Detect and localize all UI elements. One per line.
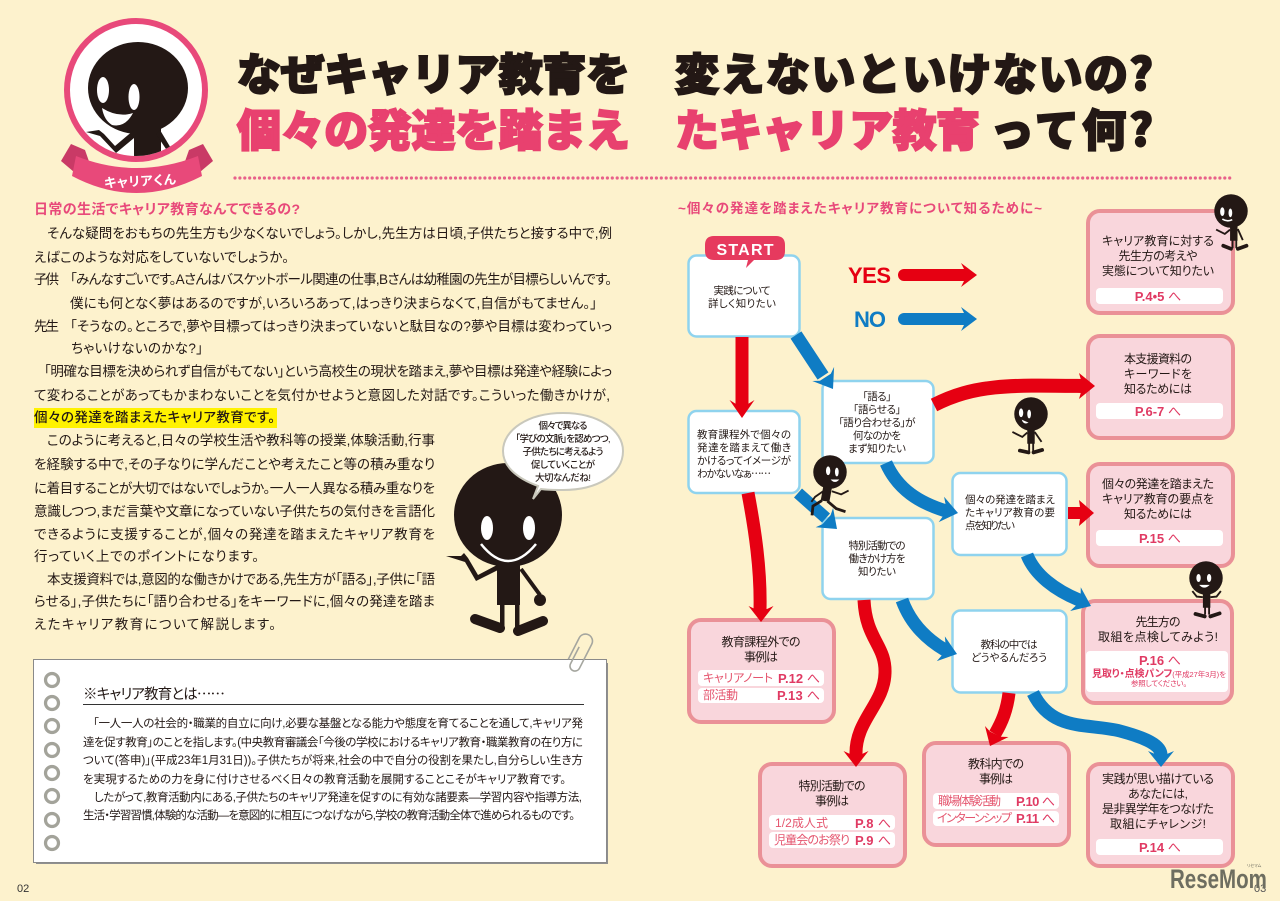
result: check efforts: [1083, 601, 1232, 703]
icon: character middle: [1012, 397, 1048, 452]
arrow: points yes: [1068, 500, 1094, 526]
flow box: key points: 個々の発達を踏まえ: [965, 493, 1055, 506]
result: subject examples: 職場体験活動: [938, 793, 1001, 808]
text block: explanation: を経験する中で,その子なりに学んだことや考えたこと等の積み重なり: [34, 456, 435, 472]
text block: intro dialogue: 先生: [34, 319, 59, 334]
text block: intro dialogue: 子供: [34, 272, 59, 287]
result: special activity examples: 1/2成人式: [775, 816, 828, 830]
flow box: special activities: 働きかけ方を: [848, 552, 906, 565]
title: なぜキャリア教育を: [237, 39, 630, 103]
watermark: ReseMom: ReseMom: [1170, 864, 1267, 895]
text block: intro dialogue: 「そうなの。ところで,夢や目標ってはっきり決まっていないと駄目なの?夢や目標は変わっていっ: [70, 319, 612, 334]
legend: NO arrow: [854, 307, 977, 332]
result: subject examples: P.10 へ: [1016, 794, 1055, 809]
arrow: points no: [1027, 555, 1096, 618]
result: outside curriculum examples: 事例は: [744, 650, 778, 664]
result: subject examples: [924, 743, 1069, 845]
flow box: start: 実践について: [714, 284, 770, 297]
callout: speech bubble: 大切なんだね!: [535, 472, 591, 484]
arrow: outside curriculum no: [798, 493, 846, 539]
result: keywords: 本支援資料の: [1124, 352, 1192, 366]
arrow: subject no: [1033, 693, 1174, 767]
callout: speech bubble: [503, 413, 623, 499]
legend: NO arrow: NO: [854, 307, 886, 332]
arrow: talk no: [886, 463, 961, 526]
label: START: [705, 236, 785, 268]
result: special activity examples: 児童会のお祭り: [774, 833, 850, 847]
flow box: special activities: [822, 518, 934, 599]
watermark: ReseMom: リセマム: [1247, 863, 1262, 868]
result: outside curriculum examples: 部活動: [703, 688, 738, 702]
result: cross-grade challenge: 是非異学年をつなげた: [1102, 801, 1214, 816]
flow box: special activities: 知りたい: [858, 565, 896, 578]
result: key points: [1088, 464, 1233, 566]
label: START: START: [716, 242, 774, 259]
panel: career education note: したがって,教育活動内にある,子供たちのキャリア発達を促すのに有効な諸要素―学習内容や指導方法,: [94, 790, 582, 804]
text block: intro dialogue: えばこのような対応をしていないでしょうか。: [34, 250, 289, 265]
heading: left column: 日常の生活でキャリア教育なんてできるの?: [34, 201, 300, 217]
callout: speech bubble: 促していくことが: [531, 459, 596, 471]
flow box: start: [688, 256, 800, 336]
text block: explanation: 行っていく上でのポイントになります。: [34, 549, 259, 564]
result: views on career education: 実態について知りたい: [1102, 264, 1214, 278]
title: って何?: [990, 95, 1153, 159]
flow box: subjects: 教科の中では: [980, 638, 1038, 651]
flow box: key points: 点を知りたい: [965, 519, 1015, 532]
flow box: outside curriculum: 教育課程外で個々の: [697, 428, 791, 441]
title: たキャリア教育: [675, 95, 980, 159]
panel: career education note: ※キャリア教育とは……: [83, 683, 225, 704]
result: outside curriculum examples: P.13 へ: [777, 688, 820, 703]
text block: intro dialogue: 「明確な目標を決められず自信がもてない」という高校生の現状を踏まえ,夢や目標は発達や経験によっ: [44, 363, 612, 379]
arrow: start no: [796, 335, 844, 396]
heading: flowchart: ~個々の発達を踏まえたキャリア教育について知るために~: [678, 200, 1042, 216]
flow box: talk: 「語り合わせる」が: [838, 416, 916, 429]
flow box: key points: たキャリア教育の要: [965, 506, 1056, 519]
panel: career education note: 「一人一人の社会的・職業的自立に向け,必要な基盤となる能力や態度を育てることを通して,キャリア発: [93, 716, 584, 730]
result: check efforts: 参照してください。: [1131, 678, 1187, 688]
flow box: talk: 「語らせる」: [853, 404, 901, 416]
flow box: talk: 「語る」: [862, 391, 892, 403]
panel: career education note: を実現するための力を身に付けさせるべく日々の教育活動を展開することこそがキャリア教育です。: [83, 772, 566, 786]
legend: YES arrow: [848, 263, 977, 288]
result: cross-grade challenge: [1088, 764, 1233, 866]
result: outside curriculum examples: P.12 へ: [778, 671, 820, 686]
flow box: special activities: 特別活動での: [848, 539, 906, 552]
text block: intro dialogue: ちゃいけないのかな?」: [71, 341, 203, 356]
text block: intro dialogue: 「みんなすごいです。Aさんはバスケットボール関連の仕事,Bさんは幼稚園の先生が目標らしいんです。: [70, 272, 612, 287]
result: keywords: キーワードを: [1124, 367, 1192, 381]
result: cross-grade challenge: 実践が思い描けている: [1102, 771, 1214, 786]
legend: YES arrow: YES: [848, 263, 891, 288]
text block: intro dialogue: て変わることがあってもかまわないことを気付かせようと意図した対話です。こういった働きかけが,: [34, 388, 610, 403]
result: special activity examples: 特別活動での: [798, 778, 866, 793]
result: key points: 知るためには: [1124, 507, 1192, 521]
result: outside curriculum examples: キャリアノート: [703, 671, 773, 685]
result: special activity examples: P.9 へ: [855, 833, 891, 848]
icon: paper clip: [565, 632, 595, 673]
text block: intro dialogue: 僕にも何となく夢はあるのですが,いろいろあって,はっきり決まらなくて,自信がもてません。」: [70, 296, 597, 311]
text block: explanation: 意識しつつ,まだ言葉や文章になっていない子供たちの気付きを言語化: [34, 504, 436, 519]
title: [237, 39, 1153, 159]
text block: explanation: できるように支援することが,個々の発達を踏まえたキャリア教育を: [34, 527, 435, 542]
flow box: outside curriculum: かけるってイメージが: [697, 454, 792, 467]
flow box: key points: [952, 473, 1066, 555]
text block: explanation: [34, 432, 436, 632]
icon: large character: [446, 463, 562, 631]
flow box: subjects: [952, 610, 1066, 692]
arrow: subject yes: [978, 693, 1009, 751]
text block: explanation: らせる」,子供たちに「語り合わせる」をキーワードに,個々の発達を踏ま: [34, 594, 435, 609]
result: special activity examples: [760, 764, 905, 866]
flow box: talk: [822, 381, 934, 463]
text block: explanation: このように考えると,日々の学校生活や教科等の授業,体験活動,行事: [47, 432, 435, 448]
callout: speech bubble: 個々で異なる: [538, 420, 588, 432]
arrow: special activities no: [902, 600, 961, 666]
arrow: start yes: [730, 337, 754, 418]
title: 個々の発達を踏まえ: [237, 95, 630, 159]
flow box: talk: まず知りたい: [848, 442, 906, 455]
result: cross-grade challenge: P.14 へ: [1139, 840, 1181, 855]
result: cross-grade challenge: あなたには,: [1128, 787, 1188, 801]
result: views on career education: 先生方の考えや: [1118, 248, 1198, 263]
result: special activity examples: 事例は: [815, 794, 849, 808]
flow box: outside curriculum: わかないなぁ……: [697, 466, 771, 481]
icon: character top right: [1214, 194, 1248, 249]
page number: left: 02: [17, 883, 29, 895]
result: outside curriculum examples: [689, 620, 834, 722]
result: keywords: P.6-7 へ: [1135, 404, 1181, 419]
panel: career education note: 達を促す教育」のことを指します。(中央教育審議会「今後の学校におけるキャリア教育・職業教育の在り方に: [83, 735, 583, 749]
result: subject examples: 事例は: [979, 772, 1013, 786]
icon: running character: [811, 455, 849, 515]
result: check efforts: 見取り・点検パンフ(平成27年3月)を: [1092, 667, 1226, 680]
result: key points: 個々の発達を踏まえた: [1102, 477, 1214, 491]
arrow: outside curriculum yes: [748, 493, 774, 622]
text block: intro dialogue: [34, 226, 612, 428]
text block: explanation: に着目することが大切ではないでしょうか。一人一人異なる積み重なりを: [34, 480, 435, 496]
result: subject examples: P.11 へ: [1016, 811, 1055, 826]
result: views on career education: [1088, 211, 1233, 313]
panel: career education note: [34, 660, 608, 864]
result: key points: P.15 へ: [1139, 531, 1181, 546]
result: cross-grade challenge: 取組にチャレンジ!: [1110, 817, 1206, 831]
result: key points: キャリア教育の要点を: [1102, 491, 1214, 506]
text block: explanation: 本支援資料では,意図的な働きかけである,先生方が「語る」,子供に「語: [47, 572, 436, 587]
text block: intro dialogue: そんな疑問をおもちの先生方も少なくないでしょう。しかし,先生方は日頃,子供たちと接する中で,例: [47, 226, 612, 241]
result: keywords: [1088, 336, 1233, 438]
icon: キャリアくん badge: キャリアくん: [104, 172, 177, 191]
flow box: start: 詳しく知りたい: [708, 297, 776, 310]
icon: character lower right: [1189, 561, 1223, 616]
arrow: keyword yes: [934, 373, 1095, 405]
callout: speech bubble: 子供たちに考えるよう: [522, 446, 604, 458]
text block: explanation: えたキャリア教育について解説します。: [34, 617, 276, 632]
result: check efforts: P.16 へ: [1139, 653, 1181, 668]
result: special activity examples: P.8 へ: [855, 816, 891, 831]
result: check efforts: 取組を点検してみよう!: [1098, 630, 1218, 644]
result: subject examples: 教科内での: [968, 756, 1024, 771]
flow box: outside curriculum: [688, 411, 800, 493]
result: keywords: 知るためには: [1124, 382, 1192, 396]
panel: career education note: 生活・学習習慣,体験的な活動―を意図的に相互につなげながら,学校の教育活動全体で進められるものです。: [83, 808, 575, 822]
page number: right: 03: [1254, 883, 1266, 895]
result: check efforts: 先生方の: [1136, 614, 1180, 629]
icon: キャリアくん badge: [61, 21, 213, 193]
panel: career education note: ついて(答申)」(平成23年1月31日))。子供たちが将来,社会の中で自分の役割を果たし,自分らしい生き方: [83, 753, 583, 767]
result: views on career education: P.4•5 へ: [1135, 289, 1181, 304]
title: 変えないといけないの?: [675, 39, 1153, 103]
result: views on career education: キャリア教育に対する: [1102, 233, 1214, 248]
arrow: special activities yes: [844, 600, 885, 767]
callout: speech bubble: 「学びの文脈」を認めつつ,: [516, 433, 610, 445]
flow box: outside curriculum: 発達を踏まえて働き: [697, 441, 791, 454]
result: outside curriculum examples: 教育課程外での: [722, 634, 800, 649]
result: subject examples: インターンシップ: [937, 811, 1012, 825]
flow box: subjects: どうやるんだろう: [971, 652, 1047, 664]
text block: intro dialogue: 個々の発達を踏まえたキャリア教育です。: [34, 410, 275, 425]
flow box: talk: 何なのかを: [853, 429, 901, 442]
